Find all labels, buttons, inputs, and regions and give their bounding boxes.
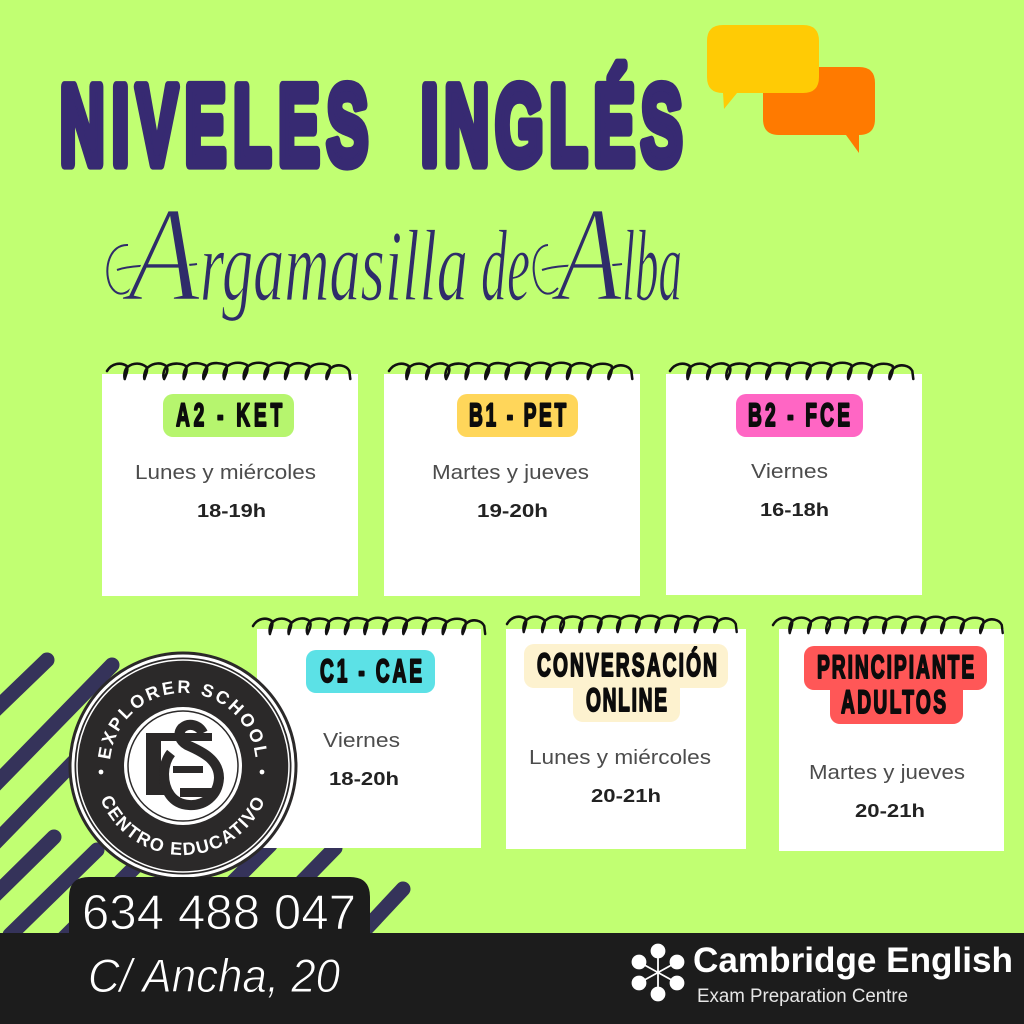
title xyxy=(60,64,682,189)
panel: Conversación online: Lunes y miércoles xyxy=(529,746,711,769)
panel: B2 - FCE: Viernes xyxy=(751,460,828,483)
panel: Conversación online: CONVERSACIÓN xyxy=(537,647,717,683)
panel: B1 - PET: Martes y jueves xyxy=(432,461,589,484)
title: INGLÉS xyxy=(421,64,682,189)
title: NIVELES xyxy=(60,64,368,189)
footer bar xyxy=(0,933,1024,1024)
panel: B2 - FCE xyxy=(666,363,922,595)
panel: B2 - FCE: 16-18h xyxy=(760,499,829,520)
panel: Principiante adultos: 20-21h xyxy=(855,800,925,821)
panel: Principiante adultos: PRINCIPIANTE xyxy=(817,649,974,685)
panel: Principiante adultos xyxy=(773,617,1004,851)
icon: Cambridge network xyxy=(632,944,684,1000)
subtitle: location: de xyxy=(468,209,530,322)
panel: Conversación online: ONLINE xyxy=(586,682,667,718)
icon: speech bubbles xyxy=(707,25,875,153)
panel: B1 - PET: B1 - PET xyxy=(469,397,566,433)
panel: A2 - KET xyxy=(102,363,358,596)
logo: Cambridge English: Exam Preparation Centre xyxy=(697,986,908,1007)
address: C/ Ancha, 20 xyxy=(88,949,340,1002)
panel: Principiante adultos: ADULTOS xyxy=(841,684,946,720)
logo: Explorer School badge: CENTRO EDUCATIVO xyxy=(102,796,263,856)
panel: C1 - CAE xyxy=(253,618,485,848)
panel: C1 - CAE: 18-20h xyxy=(329,768,399,789)
panel: Principiante adultos: Martes y jueves xyxy=(809,761,965,784)
panel: C1 - CAE: Viernes xyxy=(323,729,400,752)
subtitle: location xyxy=(107,180,682,330)
phone number box: 634 488 047 xyxy=(82,886,356,940)
panel: Conversación online: 20-21h xyxy=(591,785,661,806)
panel: C1 - CAE: C1 - CAE xyxy=(320,653,422,689)
subtitle: location: A xyxy=(532,180,622,330)
subtitle: location: lba xyxy=(622,209,682,322)
panel: B1 - PET: 19-20h xyxy=(477,500,548,521)
panel: A2 - KET: A2 - KET xyxy=(176,397,282,433)
subtitle: location: A xyxy=(121,180,200,330)
panel: B1 - PET xyxy=(384,363,640,596)
logo: Explorer School badge xyxy=(68,652,298,877)
icon: monogram xyxy=(146,725,219,805)
panel: A2 - KET: 18-19h xyxy=(197,500,266,521)
logo: Explorer School badge: EXPLORER SCHOOL xyxy=(98,680,267,759)
panel: A2 - KET: Lunes y miércoles xyxy=(135,461,316,484)
panel: B2 - FCE: B2 - FCE xyxy=(748,397,850,433)
logo: Cambridge English xyxy=(632,941,1013,1007)
panel: Conversación online xyxy=(506,616,746,849)
decorative diagonal stripes xyxy=(0,660,403,940)
logo: Cambridge English: Cambridge English xyxy=(693,941,1013,980)
subtitle: location: rgamasilla xyxy=(200,209,468,322)
